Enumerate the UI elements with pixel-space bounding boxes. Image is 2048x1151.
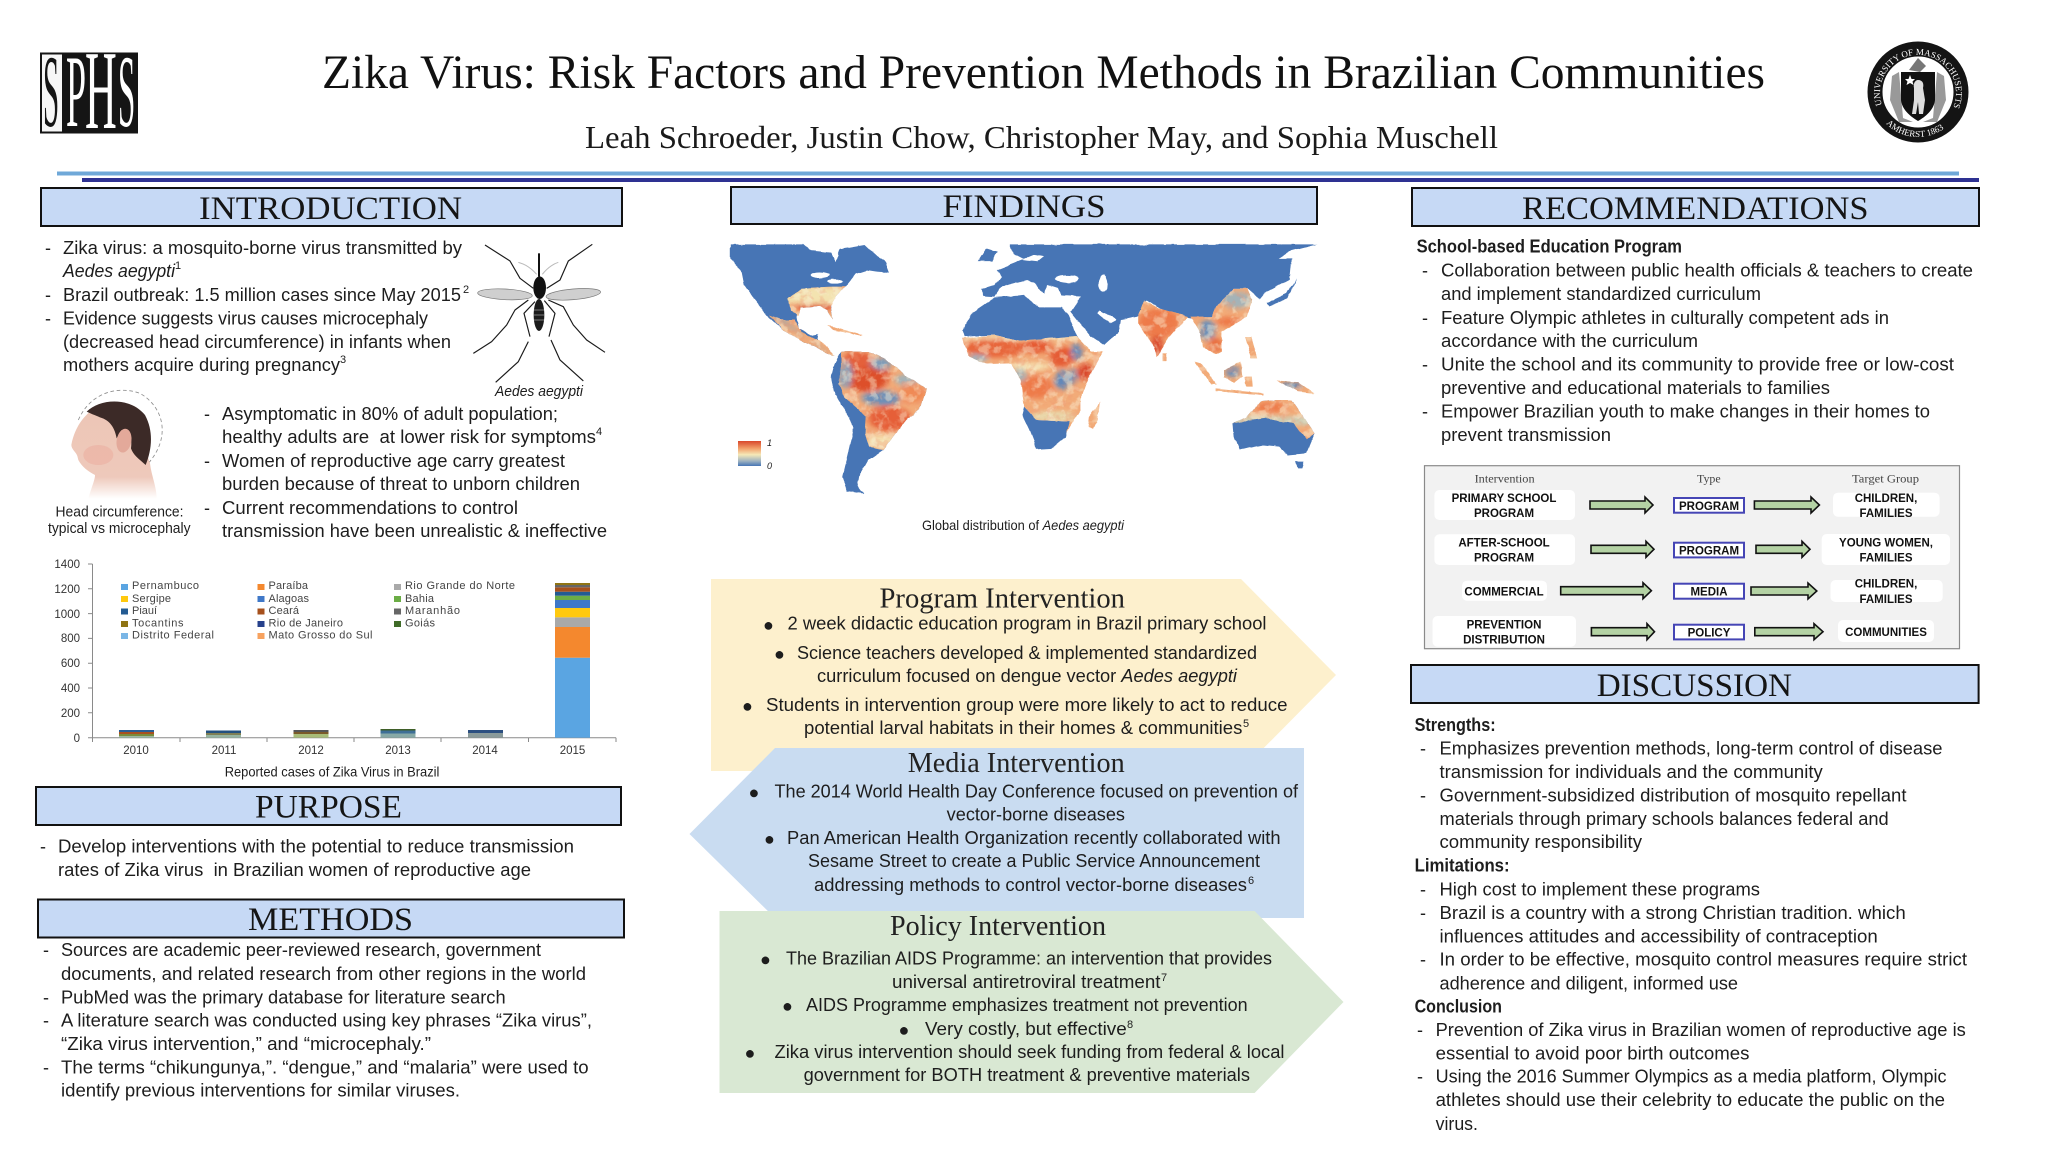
logo: SPHS: H [85,29,117,153]
arrow panel: program intervention: Program Intervention [880,582,1125,614]
text block: conclusion: - [1417,1067,1423,1087]
bar chart: reported cases: 1200 [54,584,80,596]
logo: SPHS [40,29,138,153]
row: after-school program: PROGRAM [1679,546,1739,558]
row: after-school program: YOUNG WOMEN, [1839,537,1933,549]
bar chart: reported cases: 600 [61,658,80,670]
text block: methods: identify previous interventions for similar viruses. [61,1081,460,1101]
text block: school-based education program: accordance with the curriculum [1441,331,1698,351]
bar chart: reported cases: 0 [74,733,80,745]
legend: map colour scale: 1 [767,438,772,448]
arrow panel: policy intervention [720,910,1344,1093]
text block: methods: The terms “chikungunya,”. “dengue,” and “malaria” were used to [61,1057,589,1077]
heading: findings [731,187,1317,225]
legend: Bahia [405,593,435,605]
arrow panel: program intervention: ● [774,644,785,664]
heading: discussion [1411,665,1979,704]
legend: Pernambuco [132,580,199,592]
arrow panel: media intervention: Pan American Health Organization recently collaborated with [787,828,1281,848]
map: global distribution of Aedes aegypti [730,244,1319,494]
text block: purpose: rates of Zika virus in Brazilian women of reproductive age [58,860,531,880]
text block: strengths: materials through primary schools balances federal and [1440,809,1889,829]
arrow panel: program intervention: 5 [1243,718,1249,730]
text block: limitations: - [1420,903,1426,923]
row: prevention distribution: POLICY [1688,628,1731,640]
text block: introduction bullets, upper: Aedes aegypti [62,261,176,281]
caption: infant head: typical vs microcephaly [48,520,191,537]
heading: methods: METHODS [248,902,413,938]
row: primary school program: PROGRAM [1474,508,1534,520]
text block: methods: - [43,987,49,1007]
panel: methods [38,900,624,1101]
row: after-school program: AFTER-SCHOOL [1458,537,1550,549]
text block: school-based education program: prevent transmission [1441,425,1611,445]
bar chart: reported cases: 2015 [560,745,585,757]
row: primary school program: FAMILIES [1859,508,1913,520]
legend: Sergipe [132,593,171,605]
text block: strengths: Emphasizes prevention methods, long-term control of disease [1440,739,1942,759]
row: prevention distribution: DISTRIBUTION [1463,634,1545,646]
text block: introduction bullets, upper: - [45,238,51,258]
icon: mosquito [473,244,605,382]
bars: 2010 to 2014 [119,729,503,738]
arrow panel: media intervention [690,747,1304,918]
arrow panel: policy intervention: ● [744,1043,755,1063]
text block: strengths: - [1420,739,1426,759]
text block: introduction bullets, lower: - [204,451,210,471]
panel: recommendations [1412,188,1979,649]
heading: findings: FINDINGS [942,189,1106,225]
logo: SPHS: S [118,35,135,149]
text block: introduction bullets, upper: Zika virus: a mosquito-borne virus transmitted by [63,238,462,258]
bar chart: reported cases: 2010 [123,745,149,757]
text block: strengths: Strengths: [1415,715,1496,735]
arrow panel: policy intervention: AIDS Programme emphasizes treatment not prevention [806,995,1248,1015]
bar chart: reported cases: 1400 [54,559,80,571]
text block: methods: “Zika virus intervention,” and “microcephaly.” [61,1034,431,1054]
heading: introduction: INTRODUCTION [199,191,462,227]
text block: introduction bullets, upper: - [45,285,51,305]
arrow panel: program intervention [711,579,1336,771]
column headers: Intervention [1475,472,1535,486]
title: Zika Virus: Risk Factors and Prevention Methods in Brazilian Communities [322,46,1765,99]
row: commercial: CHILDREN, [1855,579,1917,591]
text block: introduction bullets, upper: 3 [340,354,346,366]
bar: 2015 stacked [555,583,590,738]
arrow panel: media intervention: ● [764,829,775,849]
caption: infant head [48,504,191,537]
legend: Goiás [405,618,436,630]
text block: methods [43,940,592,1101]
bar chart: reported cases: 2011 [212,745,236,757]
text block: introduction bullets, upper [45,238,469,375]
text block: strengths: transmission for individuals and the community [1440,762,1823,782]
text block: introduction bullets, lower: healthy adults are at lower risk for symptoms [222,427,596,447]
text block: school-based education program: - [1422,261,1428,281]
legend: Rio Grande do Norte [405,580,515,592]
panel: discussion [1411,665,1979,1134]
text block: strengths: community responsibility [1440,832,1642,852]
bar chart: reported cases [54,559,616,757]
arrow panel: policy intervention: The Brazilian AIDS Programme: an intervention that provides [786,949,1272,969]
arrow panel: policy intervention: ● [782,996,793,1016]
legend [121,580,515,642]
legend: Ceará [268,605,300,617]
text block: methods: A literature search was conducted using key phrases “Zika virus”, [61,1011,592,1031]
arrow panel: policy intervention: government for BOTH treatment & preventive materials [804,1065,1250,1085]
text block: introduction bullets, lower [204,404,607,541]
icon: university seal: UNIVERSITY OF MASSACHUSETTS [1874,48,1962,108]
text block: school-based education program [1417,237,1973,445]
heading: purpose: PURPOSE [255,790,402,826]
text block: introduction bullets, upper: Evidence suggests virus causes microcephaly [63,308,428,328]
bar chart: reported cases: 400 [61,683,80,695]
icon: infant head with microcephaly [71,390,162,499]
legend: Paraíba [268,580,309,592]
arrow panel: policy intervention: Policy Intervention [890,910,1106,942]
legend: Rio de Janeiro [268,618,343,630]
arrow panel: media intervention: vector-borne diseases [947,805,1125,825]
text block: school-based education program: Collaboration between public health officials & teachers to create [1441,261,1973,281]
legend: Distrito Federal [132,630,214,642]
text block: introduction bullets, lower: Women of reproductive age carry greatest [222,451,565,471]
text block: methods: - [43,1057,49,1077]
icon: university seal: AMHERST 1863 [1886,121,1944,137]
text block: introduction bullets, lower: - [204,498,210,518]
caption: map: Global distribution of Aedes aegypti [922,517,1125,533]
text block: introduction bullets, upper: mothers acquire during pregnancy [63,355,340,375]
caption: bar chart: Reported cases of Zika Virus in Brazil [225,764,439,780]
text block: introduction bullets, upper: 2 [463,284,469,296]
bar chart: reported cases: 1000 [54,609,80,621]
bar chart: reported cases: 2014 [472,745,498,757]
row: commercial [1462,579,1943,606]
column headers: Target Group [1852,472,1919,486]
bar chart: reported cases: 2013 [385,745,411,757]
arrow panel: media intervention: The 2014 World Health Day Conference focused on prevention of [774,782,1299,802]
text block: limitations: adherence and diligent, informed use [1440,973,1738,993]
text block: introduction bullets, lower: Current recommendations to control [222,498,518,518]
text block: strengths: Government-subsidized distribution of mosquito repellant [1440,786,1906,806]
header rule: dark blue [82,178,1979,182]
row: prevention distribution: PREVENTION [1467,619,1541,631]
row: after-school program: FAMILIES [1859,553,1913,565]
text block: school-based education program: - [1422,402,1428,422]
row: primary school program: PROGRAM [1679,501,1739,513]
text block: methods: documents, and related research from other regions in the world [61,964,586,984]
text block: school-based education program: School-based Education Program [1417,237,1682,257]
text block: methods: - [43,940,49,960]
arrow panel: policy intervention: universal antiretroviral treatment [892,972,1160,992]
authors: Leah Schroeder, Justin Chow, Christopher May, and Sophia Muschell [585,119,1498,155]
arrow panel: policy intervention: Zika virus intervention should seek funding from federal & local [774,1042,1284,1062]
caption: infant head: Head circumference: [56,504,184,520]
arrow panel: program intervention: curriculum focused on dengue vector Aedes aegypti [817,666,1238,686]
text block: conclusion: Using the 2016 Summer Olympics as a media platform, Olympic [1436,1067,1946,1087]
heading: introduction [41,188,622,227]
diagram: intervention, type, target group [1424,466,1960,649]
text block: limitations: - [1420,880,1426,900]
text block: strengths [1415,715,1942,852]
legend: map colour scale: 0 [767,461,772,471]
arrow panel: program intervention: 2 week didactic education program in Brazil primary school [788,614,1266,634]
text block: conclusion: Prevention of Zika virus in Brazilian women of reproductive age is [1436,1020,1966,1040]
arrow panel: program intervention: potential larval habitats in their homes & communities [804,718,1242,738]
legend: Tocantins [132,618,184,630]
arrow panel: program intervention: ● [763,615,774,635]
text block: limitations: Limitations: [1415,856,1510,876]
text block: conclusion [1415,997,1966,1134]
icon: university seal [1868,42,1968,142]
text block: introduction bullets, lower: burden because of threat to unborn children [222,474,580,494]
arrow panel: policy intervention: ● [898,1020,909,1040]
text block: introduction bullets, upper: (decreased head circumference) in infants when [63,332,451,352]
row: primary school program [1434,490,1940,520]
heading: methods [38,900,624,938]
column headers [1475,472,1919,486]
arrow panel: media intervention: Sesame Street to create a Public Service Announcement [808,851,1260,871]
logo: SPHS: P [66,34,86,149]
text block: limitations: Brazil is a country with a strong Christian tradition. which [1440,903,1906,923]
panel: introduction [41,188,622,780]
arrow panel: program intervention: Students in intervention group were more likely to act to reduce [766,695,1288,715]
logo: SPHS: S [43,36,59,149]
text block: conclusion: Conclusion [1415,997,1502,1017]
text block: limitations [1415,856,1967,993]
text block: conclusion: - [1417,1020,1423,1040]
text block: methods: - [43,1011,49,1031]
row: commercial: FAMILIES [1859,594,1913,606]
legend: Mato Grosso do Sul [268,630,372,642]
arrow panel: policy intervention: Very costly, but effective [925,1019,1127,1039]
text block: limitations: - [1420,950,1426,970]
arrow panel: media intervention: addressing methods to control vector-borne diseases [814,875,1247,895]
caption: mosquito: Aedes aegypti [494,383,584,400]
text block: introduction bullets, upper: 1 [175,260,181,272]
text block: limitations: High cost to implement these programs [1440,880,1760,900]
row: after-school program [1434,534,1950,565]
header rule: light blue [57,172,1959,176]
heading: purpose [36,787,621,826]
text block: school-based education program: preventive and educational materials to families [1441,378,1830,398]
row: commercial: COMMERCIAL [1464,586,1544,598]
column headers: Type [1697,472,1721,486]
bar chart: reported cases: 2012 [298,745,324,757]
arrow panel: policy intervention: ● [760,950,771,970]
text block: limitations: influences attitudes and accessibility of contraception [1440,926,1878,946]
text block: school-based education program: - [1422,308,1428,328]
text block: purpose: Develop interventions with the potential to reduce transmission [58,837,574,857]
text block: introduction bullets, upper: Brazil outbreak: 1.5 million cases since May 2015 [63,285,461,305]
heading: discussion: DISCUSSION [1597,668,1792,704]
heading: recommendations [1412,188,1979,227]
text block: introduction bullets, upper: - [45,308,51,328]
legend: Alagoas [268,593,310,605]
row: commercial: MEDIA [1690,586,1728,598]
text block: school-based education program: Feature Olympic athletes in culturally competent ads in [1441,308,1889,328]
text block: school-based education program: Empower Brazilian youth to make changes in their homes to [1441,402,1930,422]
arrow panel: program intervention: Science teachers developed & implemented standardized [797,643,1257,663]
text block: conclusion: virus. [1436,1114,1478,1134]
row: prevention distribution [1432,616,1934,647]
text block: school-based education program: - [1422,355,1428,375]
arrow panel: media intervention: Media Intervention [908,747,1125,779]
text block: school-based education program: and implement standardized curriculum [1441,284,1761,304]
arrow panel: program intervention: ● [742,696,753,716]
row: after-school program: PROGRAM [1474,553,1534,565]
row: prevention distribution: COMMUNITIES [1845,627,1927,639]
text block: purpose [40,837,574,880]
text block: introduction bullets, lower: - [204,404,210,424]
text block: strengths: - [1420,786,1426,806]
text block: school-based education program: Unite the school and its community to provide free or low-cost [1441,355,1954,375]
arrow panel: media intervention: 6 [1248,875,1254,887]
text block: introduction bullets, lower: 4 [596,426,602,438]
legend: Piauí [132,605,157,617]
bar chart: reported cases: 800 [61,633,80,645]
text block: conclusion: athletes should use their celebrity to educate the public on the [1436,1090,1945,1110]
arrow panel: policy intervention: 8 [1127,1019,1133,1031]
text block: limitations: In order to be effective, mosquito control measures require strict [1440,950,1967,970]
row: primary school program: CHILDREN, [1855,493,1917,505]
panel: findings [690,187,1344,1093]
row: primary school program: PRIMARY SCHOOL [1452,493,1556,505]
text block: introduction bullets, lower: transmission have been unrealistic & ineffective [222,521,607,541]
legend: map colour scale [738,438,772,471]
bar chart: reported cases: 200 [61,708,80,720]
text block: methods: Sources are academic peer-reviewed research, government [61,940,541,960]
panel: purpose [36,787,621,880]
text block: conclusion: essential to avoid poor birth outcomes [1436,1043,1750,1063]
arrow panel: media intervention: ● [748,782,759,802]
text block: introduction bullets, lower: Asymptomatic in 80% of adult population; [222,404,558,424]
text block: methods: PubMed was the primary database for literature search [61,987,506,1007]
heading: recommendations: RECOMMENDATIONS [1522,191,1868,227]
text block: purpose: - [40,837,46,857]
legend: Maranhão [405,605,460,617]
arrow panel: policy intervention: 7 [1161,972,1167,984]
